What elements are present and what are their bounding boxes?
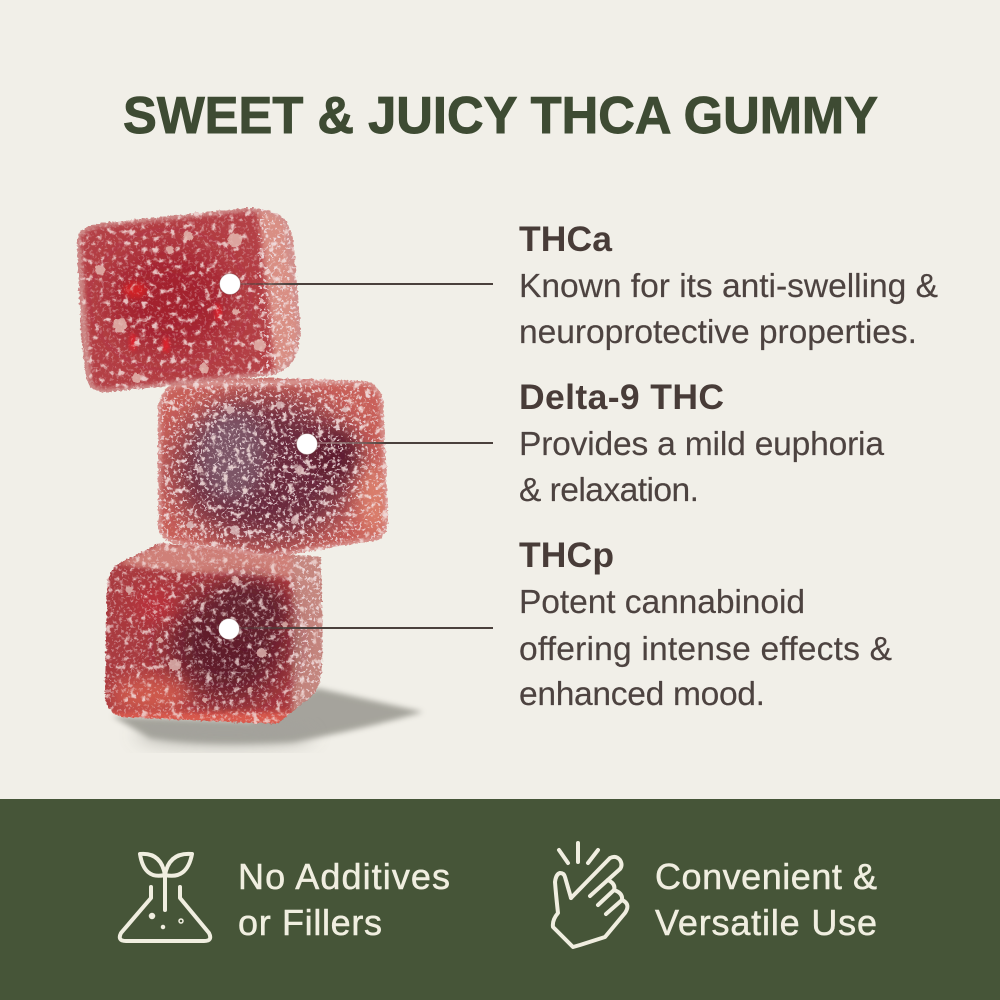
feature text: convenient use: Convenient & — [655, 856, 877, 897]
leader line — [317, 442, 493, 444]
heading: Delta-9 THC — [519, 377, 724, 417]
marker dot — [220, 274, 240, 294]
gummy 2 middle — [157, 378, 389, 557]
marker dot — [296, 434, 318, 454]
feature text: convenient use: Versatile Use — [655, 902, 877, 943]
description: neuroprotective properties. — [519, 314, 917, 351]
icon: flask with sprout — [120, 854, 210, 941]
gummy stack — [70, 200, 423, 745]
footer band — [0, 799, 1000, 1000]
heading: THCp — [519, 535, 614, 575]
icon: snapping hand — [553, 843, 627, 947]
feature text: convenient use — [655, 856, 877, 943]
callout: Delta-9 THC — [296, 377, 884, 509]
marker dot — [218, 618, 240, 640]
callout: THCp — [218, 535, 892, 713]
description: & relaxation. — [519, 472, 699, 509]
gummy 1 top — [76, 207, 301, 393]
title: SWEET & JUICY THCA GUMMY — [123, 87, 878, 145]
feature text: no additives — [238, 856, 450, 943]
description: Known for its anti-swelling & — [519, 268, 938, 305]
feature text: no additives: or Fillers — [238, 902, 382, 943]
description: Potent cannabinoid — [519, 584, 805, 621]
heading: THCa — [519, 219, 612, 259]
description: offering intense effects & — [519, 631, 892, 668]
callout: THCa — [220, 219, 938, 351]
leader line — [240, 627, 493, 629]
description — [519, 426, 884, 509]
cast shadow — [112, 688, 423, 745]
description — [519, 584, 892, 713]
description — [519, 268, 938, 351]
description: Provides a mild euphoria — [519, 426, 884, 463]
gummy 3 bottom — [100, 540, 332, 730]
feature text: no additives: No Additives — [238, 856, 450, 897]
description: enhanced mood. — [519, 676, 765, 713]
leader line — [240, 283, 493, 285]
